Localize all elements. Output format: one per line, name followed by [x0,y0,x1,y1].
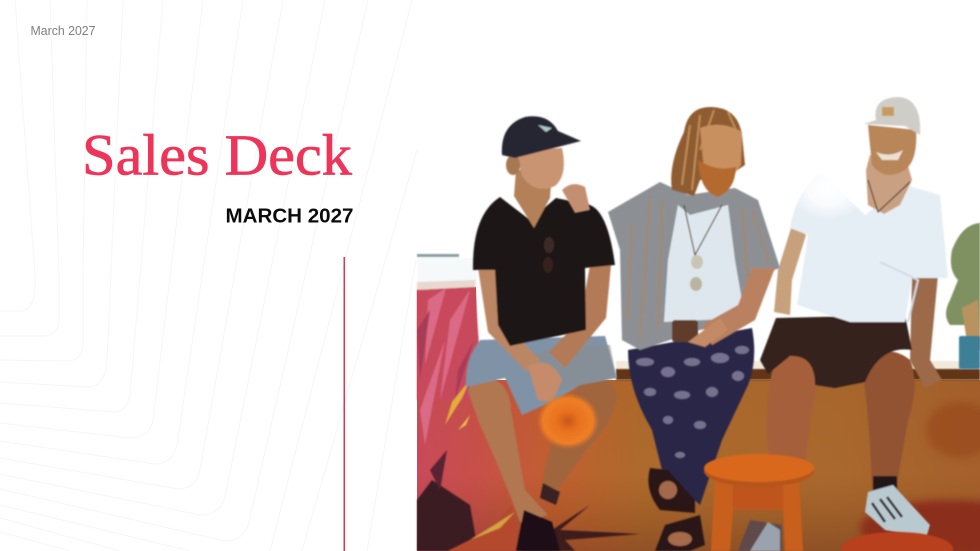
subtitle: MARCH 2027 [226,204,354,228]
window ledge [616,361,980,370]
sandals [648,468,695,513]
neck and face [514,170,552,228]
patterned trousers [628,328,754,505]
shoe under stool [738,520,782,551]
shoe [865,485,930,538]
cardigan [608,182,780,350]
date label: March 2027 [30,24,96,38]
distant sea [417,254,477,282]
cap [502,116,581,158]
blue cup [959,336,980,369]
hands [528,363,562,402]
beard [698,160,736,197]
black shirt [473,197,615,346]
legs [766,354,817,460]
sun glow [790,156,866,220]
white tee [790,172,948,322]
arms [478,268,540,372]
wall [417,280,980,551]
person middle [562,107,780,551]
orange stool [704,454,814,551]
arm over friend [562,184,590,213]
background line pattern [0,0,440,551]
face [700,125,742,190]
red stool [841,532,953,551]
person right [760,97,948,538]
necklace [684,205,722,255]
sock [873,476,897,496]
title: Sales Deck [82,122,352,188]
sunglasses [544,237,554,253]
sky [417,0,980,551]
orange lens flare [537,393,599,449]
white undershirt [664,205,745,322]
dark shorts [760,315,912,388]
photo: three friends sitting on a wall [417,0,980,551]
legs [468,378,548,522]
shoes [516,510,560,551]
phone and hand [672,320,698,342]
face [868,125,916,175]
arms [774,225,806,315]
person left [466,116,617,551]
mural [417,280,640,551]
forearm [702,268,775,345]
vertical accent line [344,257,345,551]
palm tree [946,223,980,350]
wall stain [860,500,980,551]
cap [864,97,920,135]
shorts [466,336,617,415]
hair [671,107,745,196]
